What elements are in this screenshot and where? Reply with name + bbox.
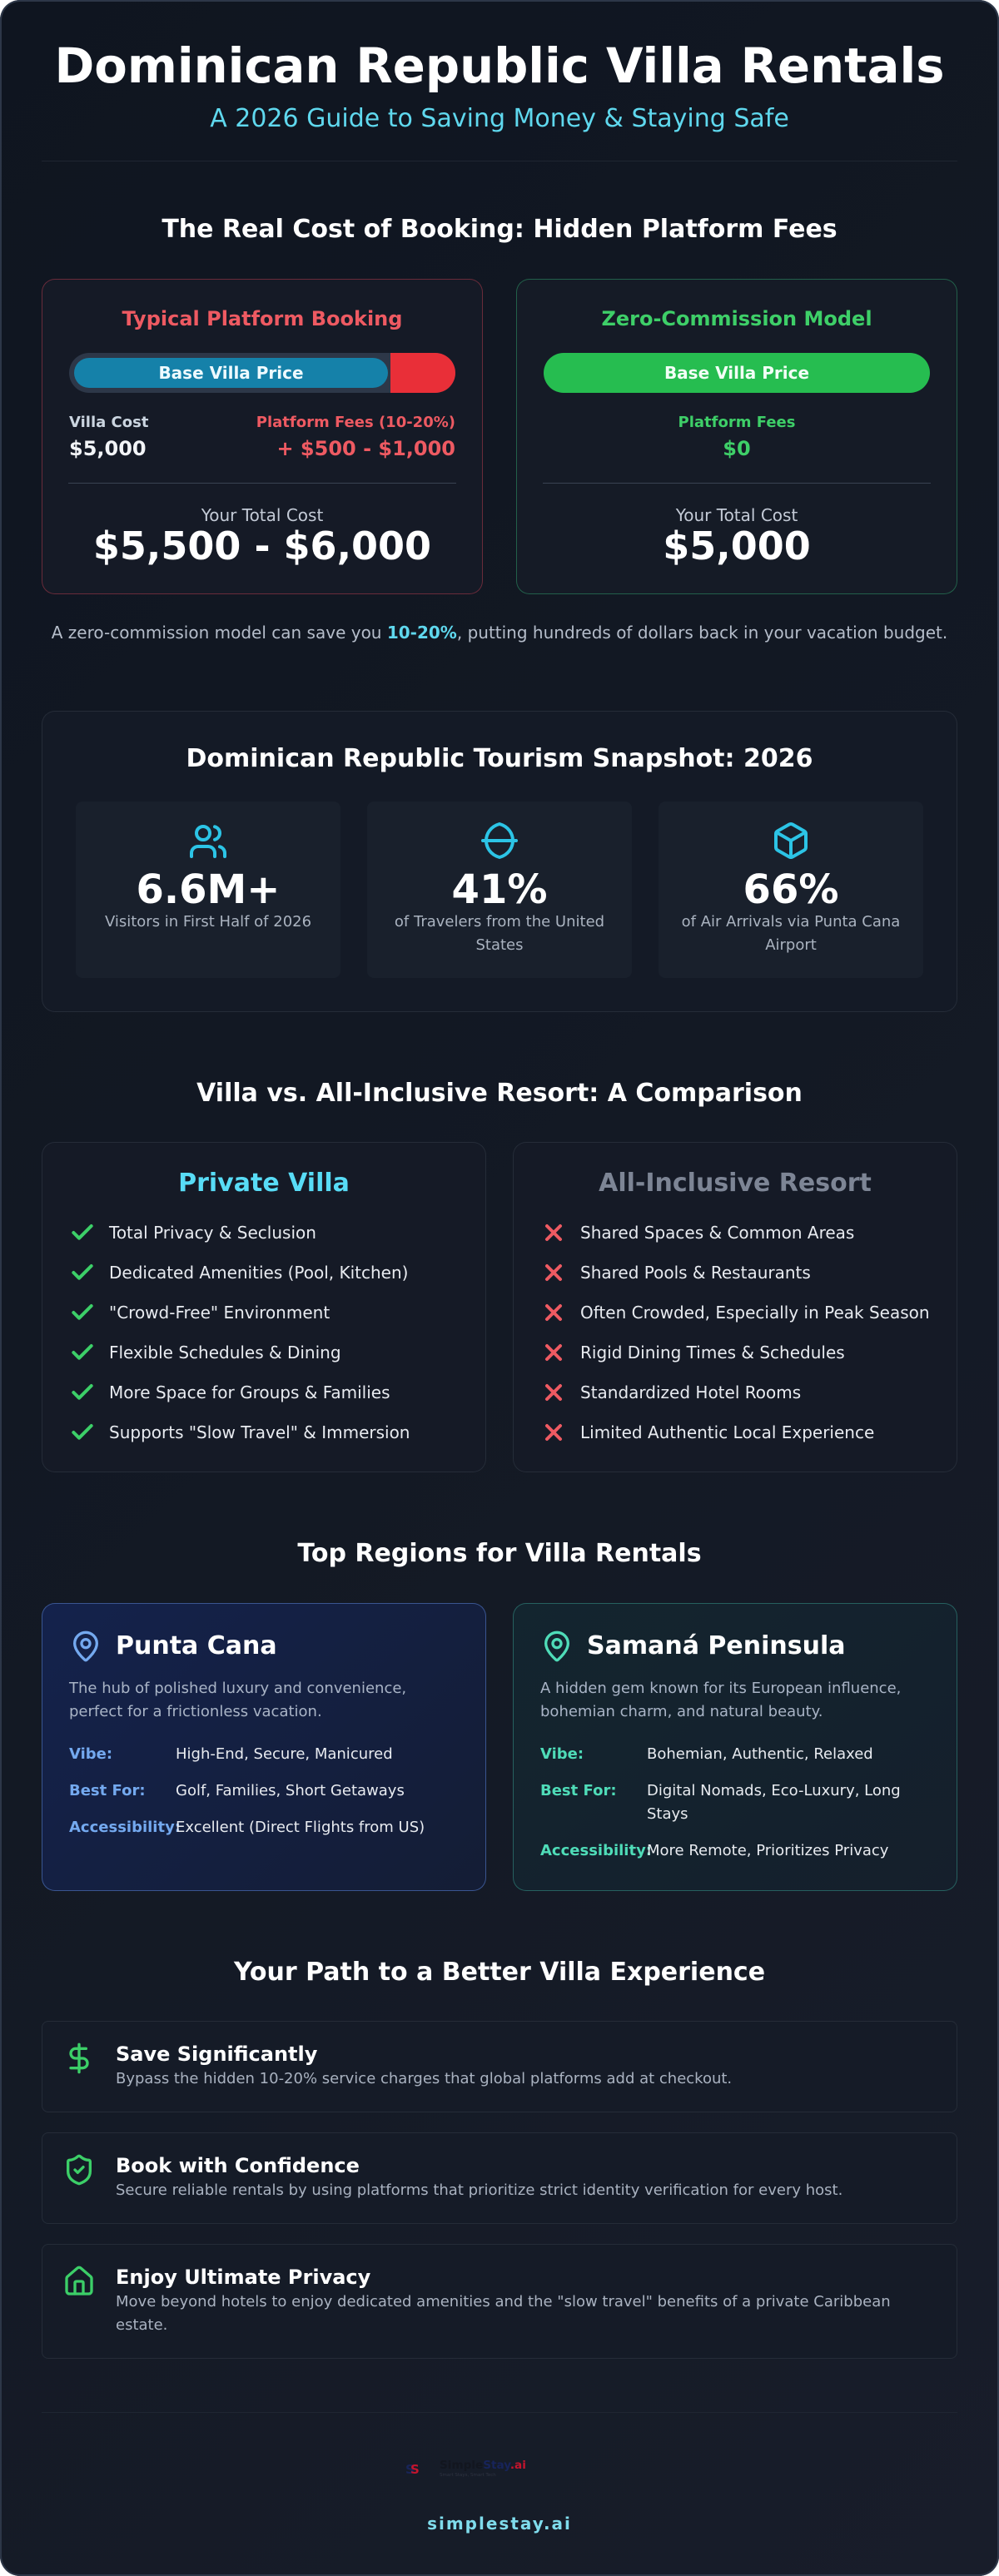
card heading: Zero-Commission Model <box>601 307 872 330</box>
stat: us travelers <box>367 802 632 978</box>
step title: Save Significantly <box>116 2042 317 2066</box>
icon: house <box>65 2266 93 2296</box>
step description: Bypass the hidden 10-20% service charges that global platforms add at checkout. <box>116 2070 732 2087</box>
panel: punta cana <box>42 1603 486 1891</box>
stacked price bar <box>69 353 455 393</box>
villa cost value: $5,000 <box>69 437 147 460</box>
item: Standardized Hotel Rooms <box>580 1382 801 1402</box>
panel: samana peninsula <box>513 1603 957 1891</box>
logo mark: S <box>405 2462 415 2477</box>
platform fee value: + $500 - $1,000 <box>276 437 455 460</box>
heading: comparison: Villa vs. All-Inclusive Resort: A Comparison <box>196 1079 803 1108</box>
step title: Book with Confidence <box>116 2154 360 2177</box>
step description: Secure reliable rentals by using platforms that prioritize strict identity verification for every host. <box>116 2181 842 2199</box>
resort heading: All-Inclusive Resort <box>599 1169 872 1198</box>
snapshot heading: Dominican Republic Tourism Snapshot: 2026 <box>186 744 813 773</box>
accessibility label: Accessibility: <box>540 1842 652 1859</box>
platform fee label: Platform Fees (10-20%) <box>256 414 455 431</box>
villa cost label: Villa Cost <box>69 414 148 431</box>
step: save significantly <box>42 2021 957 2112</box>
total value: $5,000 <box>663 524 811 568</box>
stat number: 6.6M+ <box>136 866 280 913</box>
panel: all-inclusive resort <box>513 1142 957 1472</box>
best for value: Digital Nomads, Eco-Luxury, Long Stays <box>647 1782 901 1823</box>
title: Dominican Republic Villa Rentals <box>55 38 944 94</box>
icon: dollar <box>69 2042 89 2074</box>
stat number: 66% <box>743 866 838 913</box>
icon: shield check <box>67 2154 92 2186</box>
icon: map pin <box>73 1631 98 1661</box>
platform fee label: Platform Fees <box>678 414 795 431</box>
panel: private villa <box>42 1142 486 1472</box>
base price segment: Base Villa Price <box>158 363 304 383</box>
full price bar: Base Villa Price <box>664 363 809 383</box>
item: Supports "Slow Travel" & Immersion <box>109 1422 410 1442</box>
best for value: Golf, Families, Short Getaways <box>176 1782 405 1799</box>
step description: Move beyond hotels to enjoy dedicated amenities and the "slow travel" benefits of a private Caribbean estate. <box>116 2293 891 2334</box>
best for label: Best For: <box>69 1782 146 1799</box>
region name: Punta Cana <box>116 1631 277 1660</box>
vibe label: Vibe: <box>69 1745 112 1763</box>
item: Dedicated Amenities (Pool, Kitchen) <box>109 1263 408 1283</box>
step: book with confidence <box>42 2132 957 2224</box>
icon: users <box>190 825 226 858</box>
heading: top regions: Top Regions for Villa Rentals <box>297 1539 702 1568</box>
stat number: 41% <box>452 866 547 913</box>
heading: hidden fees: The Real Cost of Booking: Hidden Platform Fees <box>162 215 837 244</box>
fee segment <box>390 353 455 393</box>
item: Often Crowded, Especially in Peak Season <box>580 1303 930 1323</box>
panel: zero commission model <box>516 279 957 594</box>
step: enjoy ultimate privacy <box>42 2244 957 2359</box>
villa heading: Private Villa <box>178 1169 350 1198</box>
vibe value: High-End, Secure, Manicured <box>176 1745 393 1763</box>
vibe label: Vibe: <box>540 1745 584 1763</box>
logo wordmark: SimpleStay.ai <box>440 2459 526 2472</box>
item: Shared Pools & Restaurants <box>580 1263 811 1283</box>
accessibility label: Accessibility: <box>69 1819 181 1836</box>
step title: Enjoy Ultimate Privacy <box>116 2266 370 2289</box>
panel: tourism snapshot <box>42 711 957 1012</box>
icon: globe <box>481 822 518 859</box>
accessibility value: More Remote, Prioritizes Privacy <box>647 1842 888 1859</box>
platform fee value: $0 <box>723 437 751 460</box>
panel: typical platform booking <box>42 279 483 594</box>
villa benefits list <box>72 1223 410 1442</box>
total label: Your Total Cost <box>676 505 798 525</box>
full price bar <box>544 353 930 393</box>
item: Limited Authentic Local Experience <box>580 1422 874 1442</box>
stat: punta cana arrivals <box>659 802 923 978</box>
footer logo: S <box>410 2462 420 2477</box>
total label: Your Total Cost <box>201 505 323 525</box>
footer logo <box>405 2459 526 2478</box>
item: "Crowd-Free" Environment <box>109 1303 330 1323</box>
base price segment <box>74 358 388 388</box>
item: More Space for Groups & Families <box>109 1382 390 1402</box>
footer url: simplestay.ai <box>427 2514 572 2534</box>
item: Total Privacy & Seclusion <box>109 1223 316 1243</box>
accessibility value: Excellent (Direct Flights from US) <box>176 1819 425 1836</box>
heading: path: Your Path to a Better Villa Experience <box>234 1958 765 1987</box>
logo tagline: Smart Stays, Smart Tech <box>440 2473 496 2478</box>
stat label: of Travelers from the United States <box>395 913 604 954</box>
region description: The hub of polished luxury and convenience, perfect for a frictionless vacation. <box>69 1680 406 1720</box>
stat: visitors <box>76 802 340 978</box>
item: Flexible Schedules & Dining <box>109 1343 341 1362</box>
stat label: Visitors in First Half of 2026 <box>105 913 311 931</box>
card heading: Typical Platform Booking <box>122 307 402 330</box>
total value: $5,500 - $6,000 <box>93 524 431 568</box>
subtitle: A 2026 Guide to Saving Money & Staying Safe <box>210 104 789 133</box>
icon: box <box>774 822 808 859</box>
savings note: A zero-commission model can save you 10-20%, putting hundreds of dollars back in your vacation budget. <box>52 623 947 643</box>
region name: Samaná Peninsula <box>587 1631 845 1660</box>
item: Shared Spaces & Common Areas <box>580 1223 854 1243</box>
resort drawbacks list <box>544 1223 930 1442</box>
icon: map pin <box>544 1631 569 1661</box>
stat label: of Air Arrivals via Punta Cana Airport <box>682 913 900 954</box>
vibe value: Bohemian, Authentic, Relaxed <box>647 1745 873 1763</box>
item: Rigid Dining Times & Schedules <box>580 1343 845 1362</box>
region description: A hidden gem known for its European influence, bohemian charm, and natural beauty. <box>540 1680 901 1720</box>
best for label: Best For: <box>540 1782 617 1799</box>
